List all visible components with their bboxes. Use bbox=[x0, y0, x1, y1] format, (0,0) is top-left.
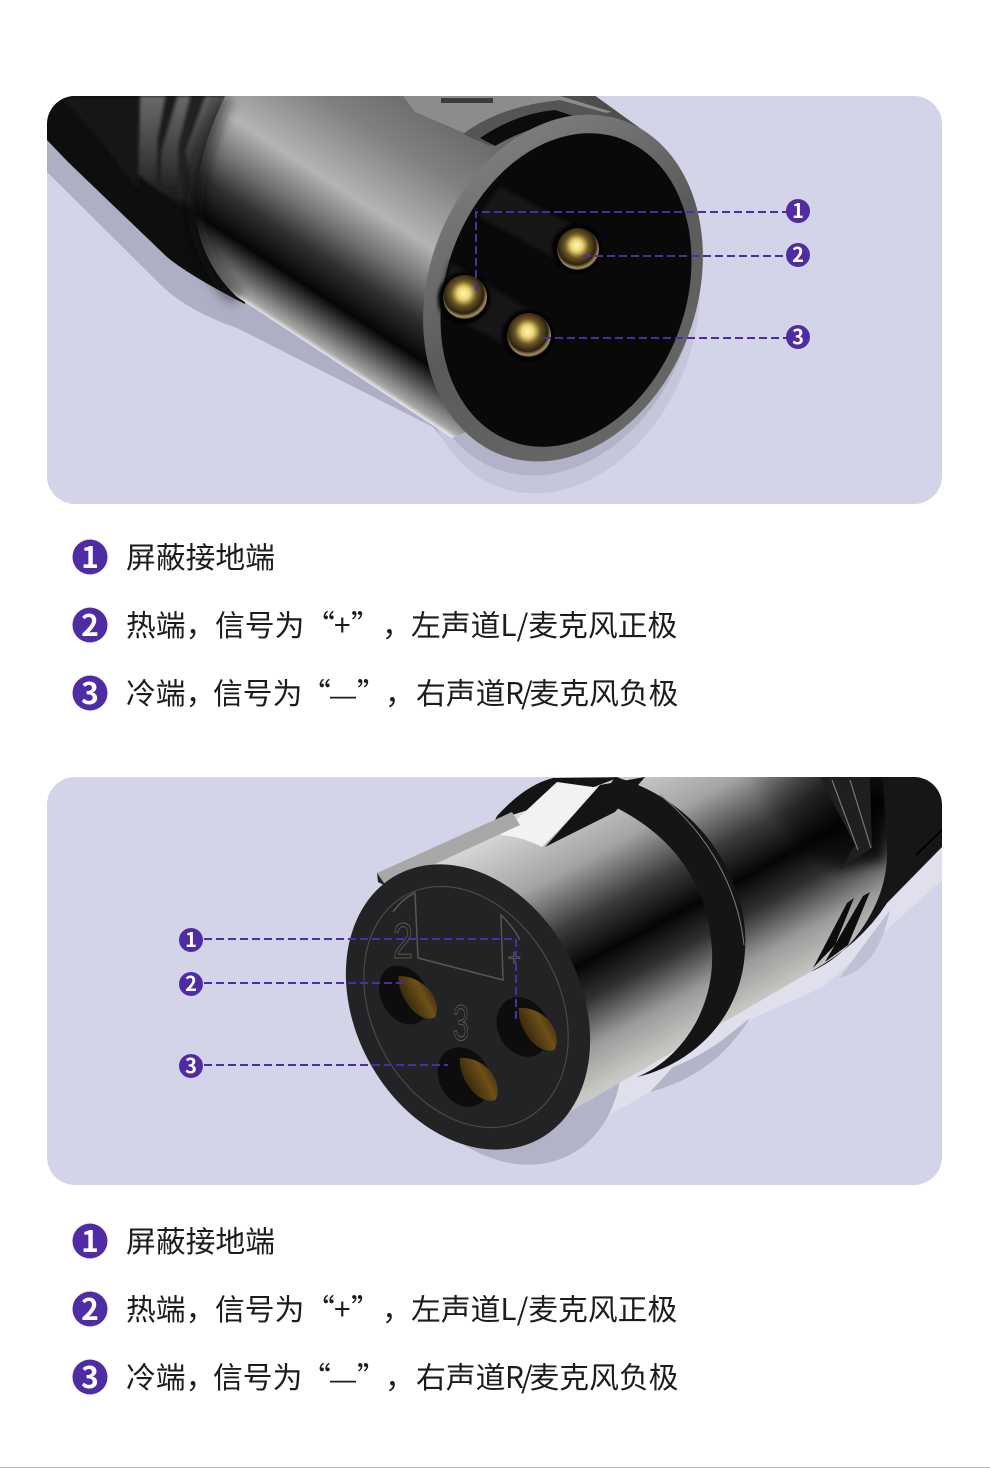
legend row 3: — bbox=[330, 680, 356, 710]
white latch tab bbox=[500, 782, 600, 847]
legend row 3: ” bbox=[357, 669, 387, 713]
legend row 3: 右声道 bbox=[416, 669, 505, 713]
female connector illustration bbox=[346, 777, 942, 1164]
latch end bbox=[377, 873, 384, 884]
callout line 1 bbox=[204, 939, 516, 1023]
embossed keyway bbox=[393, 893, 520, 980]
legend row 2: 2 bbox=[81, 601, 99, 645]
panel: male XLR connector bbox=[47, 96, 942, 504]
pin halos bbox=[438, 224, 602, 362]
flange highlight bbox=[660, 795, 744, 945]
legend row 3: 麦克风负极 bbox=[530, 1353, 678, 1397]
legend row 3: — bbox=[330, 1364, 356, 1394]
legend row 2: “ bbox=[305, 601, 335, 645]
legend row 3: ， bbox=[385, 669, 415, 713]
embossed numbers bbox=[394, 922, 520, 1041]
legend row 2: + bbox=[334, 1285, 351, 1329]
legend row 3: “ bbox=[301, 669, 331, 713]
rear black boot bbox=[47, 96, 260, 304]
embossed numbers: 2 bbox=[393, 913, 413, 969]
legend row 3: ， bbox=[385, 1353, 415, 1397]
marker 2 bbox=[179, 968, 203, 997]
callout line 1 bbox=[476, 212, 787, 290]
legend row 3: / bbox=[521, 1353, 533, 1397]
legend row 3: 信号为 bbox=[213, 1353, 302, 1397]
rear collar grooves bbox=[813, 777, 942, 968]
legend row 2: 2 bbox=[81, 1285, 99, 1329]
outer ring of face bbox=[423, 114, 703, 462]
marker 3 bbox=[786, 321, 810, 350]
legend row 2: ” bbox=[351, 1285, 381, 1329]
callout line 2 bbox=[204, 982, 408, 984]
legend row 2: 左声道L/麦克风正极 bbox=[411, 601, 677, 645]
panel: female XLR connector bbox=[47, 760, 942, 1207]
legend row 2: 信号为 bbox=[215, 1285, 304, 1329]
legend row 2: ” bbox=[351, 601, 381, 645]
barrel rear edge shading bbox=[195, 96, 237, 297]
embossed numbers: 3 bbox=[453, 995, 469, 1051]
boot highlight bbox=[61, 96, 138, 182]
legend row 3: 冷端， bbox=[126, 669, 215, 713]
legend row 3: 信号为 bbox=[213, 669, 302, 713]
collar with grooves bbox=[137, 96, 225, 204]
legend row 2: ， bbox=[382, 1285, 412, 1329]
legend row 3 bbox=[72, 1353, 678, 1397]
legend row 3 bbox=[72, 669, 678, 713]
legend row 3: R bbox=[505, 669, 524, 713]
barrel rear darkening bbox=[745, 770, 885, 870]
front face bbox=[346, 864, 590, 1150]
legend row 1: 屏蔽接地端 bbox=[126, 1217, 275, 1261]
legend row 3: / bbox=[521, 669, 533, 713]
legend row 3: 3 bbox=[81, 669, 99, 713]
flange ring bbox=[600, 777, 745, 1077]
marker 3: 3 bbox=[185, 1050, 197, 1079]
legend row 3: 麦克风负极 bbox=[530, 669, 678, 713]
legend row 3: 冷端， bbox=[126, 1353, 215, 1397]
callout line 3 bbox=[543, 337, 787, 339]
marker 1 bbox=[786, 195, 810, 224]
latch dark wedge bbox=[545, 777, 645, 847]
male connector illustration bbox=[47, 96, 703, 494]
legend row 3: R bbox=[505, 1353, 524, 1397]
metal barrel bbox=[197, 96, 644, 438]
marker 1: 1 bbox=[185, 924, 197, 953]
rear black boot bbox=[810, 777, 942, 972]
gold pin: 3 bbox=[507, 313, 551, 357]
legend row 2 bbox=[72, 1285, 677, 1329]
legend: male connector bbox=[72, 533, 678, 713]
pin tracks bbox=[437, 190, 568, 341]
marker 1 bbox=[179, 924, 203, 953]
legend row 2: “ bbox=[305, 1285, 335, 1329]
inner black face bbox=[440, 133, 692, 447]
marker 2: 2 bbox=[185, 968, 197, 997]
latch and slot bbox=[403, 96, 612, 146]
legend row 1: 1 bbox=[81, 533, 99, 577]
legend row 2: 热端， bbox=[126, 1285, 215, 1329]
silver latch strip bbox=[377, 812, 520, 886]
gold pin: 2 bbox=[557, 228, 599, 270]
connector shadow bbox=[47, 140, 700, 494]
callout line 2 bbox=[583, 255, 787, 257]
legend row 1: 屏蔽接地端 bbox=[126, 533, 275, 577]
legend row 2: 左声道L/麦克风正极 bbox=[411, 1285, 677, 1329]
gold pin: 1 bbox=[443, 275, 487, 319]
legend row 2: + bbox=[334, 601, 351, 645]
embossed numbers: + bbox=[508, 945, 521, 970]
legend row 3: ” bbox=[357, 1353, 387, 1397]
barrel body bbox=[434, 777, 888, 1112]
legend row 2 bbox=[72, 601, 677, 645]
legend row 3: 3 bbox=[81, 1353, 99, 1397]
legend row 2: 热端， bbox=[126, 601, 215, 645]
embossed inner ring bbox=[363, 886, 569, 1128]
legend row 3: 右声道 bbox=[416, 1353, 505, 1397]
legend row 3: “ bbox=[301, 1353, 331, 1397]
legend row 1: 1 bbox=[81, 1217, 99, 1261]
socket holes bbox=[379, 966, 557, 1107]
legend row 2: 信号为 bbox=[215, 601, 304, 645]
marker 2: 2 bbox=[792, 239, 804, 268]
latch dark collar bbox=[495, 777, 620, 820]
connector shadow bbox=[463, 848, 942, 1164]
marker 3 bbox=[179, 1050, 203, 1079]
legend: female connector bbox=[72, 1217, 678, 1397]
marker 3: 3 bbox=[792, 321, 804, 350]
marker 2 bbox=[786, 239, 810, 268]
marker 1: 1 bbox=[792, 195, 804, 224]
legend row 2: ， bbox=[382, 601, 412, 645]
callout line 3 bbox=[204, 1064, 448, 1066]
